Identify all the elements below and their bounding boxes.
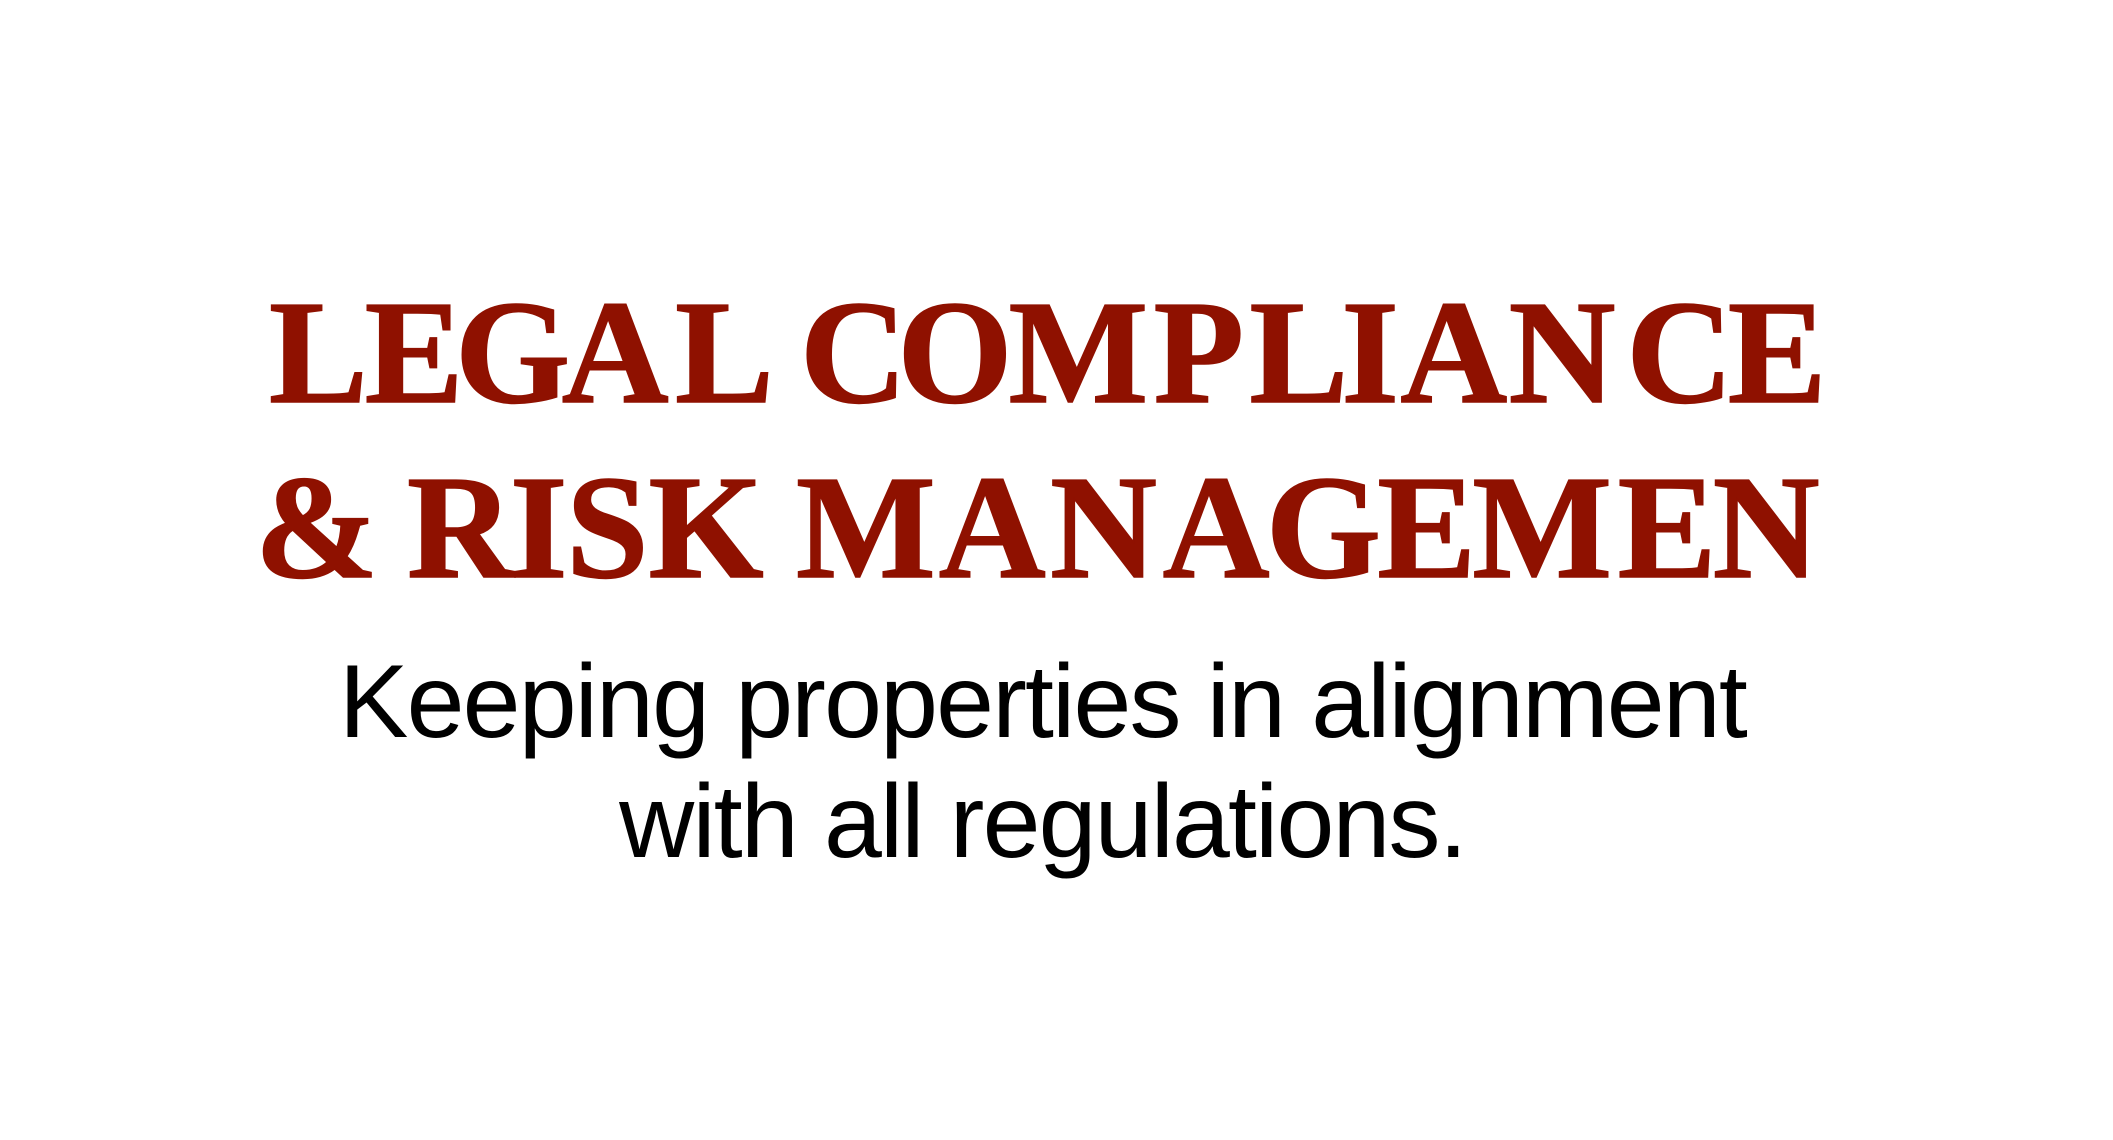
title: COMPLIANCE — [800, 271, 1827, 435]
subtitle text: Keeping properties in alignment — [339, 644, 1746, 760]
title — [255, 271, 1827, 610]
title: RISK — [407, 446, 764, 610]
title: MANAGEMEN — [796, 446, 1820, 610]
subtitle text: with all regulations. — [619, 764, 1466, 880]
title: & — [255, 446, 378, 610]
subtitle text — [339, 644, 1747, 880]
title: LEGAL — [269, 271, 774, 435]
